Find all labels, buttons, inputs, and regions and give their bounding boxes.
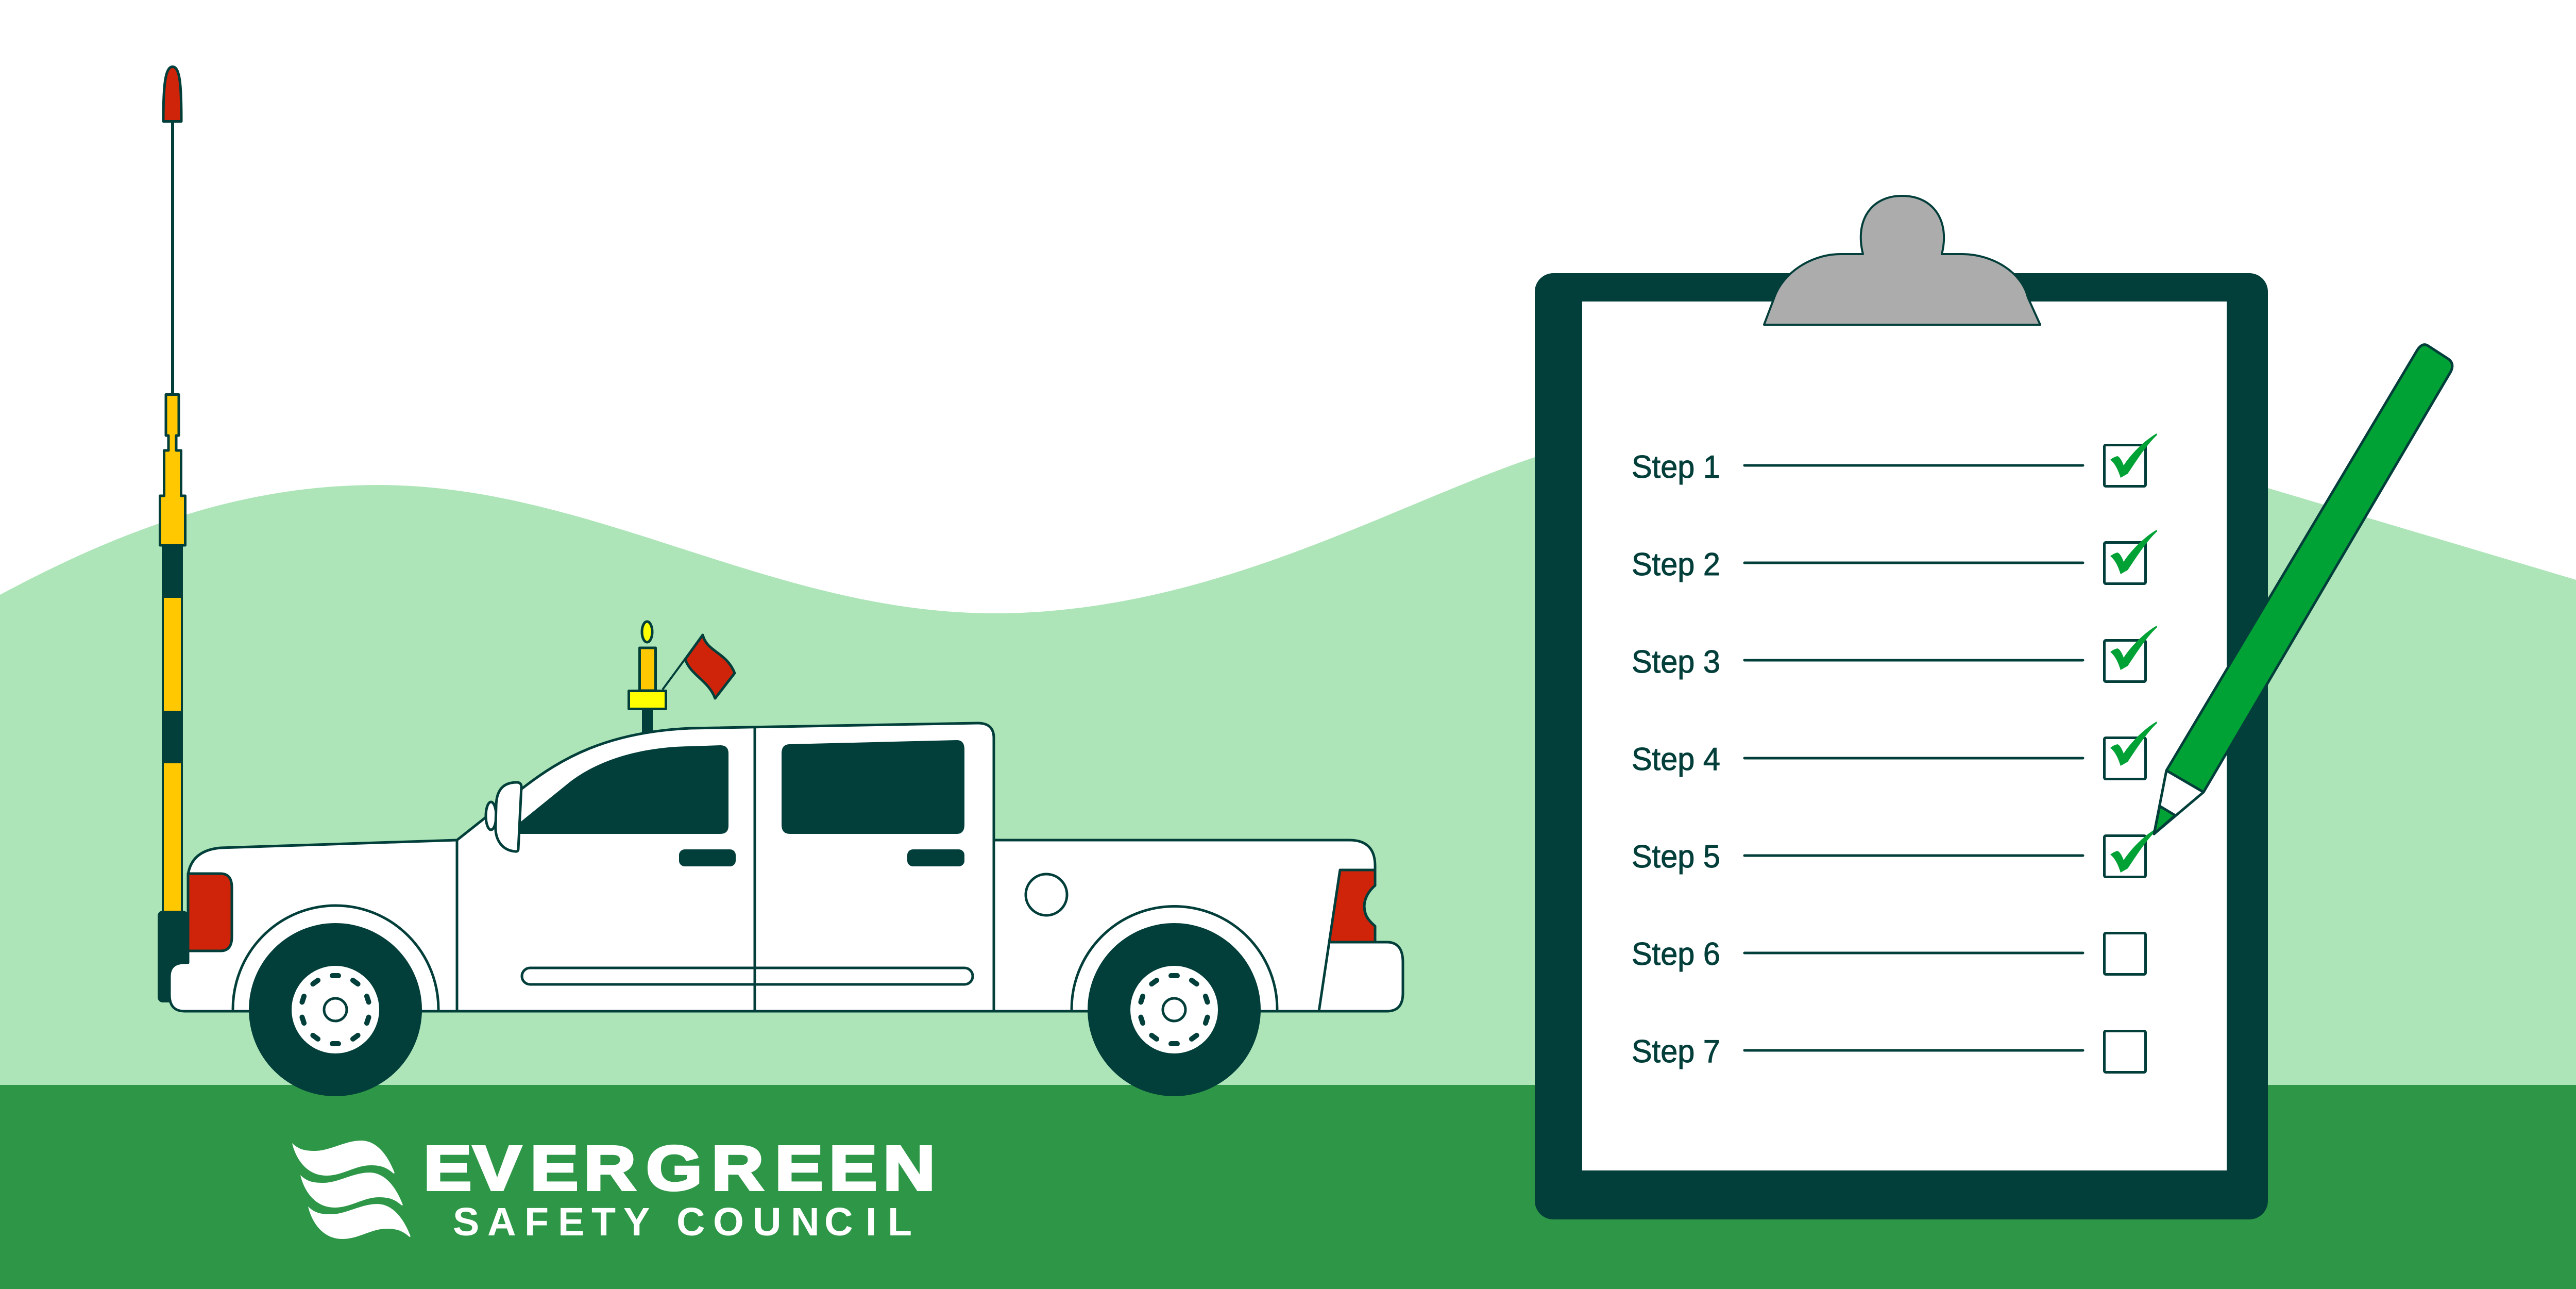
step 7 row: Step 7	[1632, 1034, 1720, 1069]
pole yellow stripe upper	[164, 598, 181, 711]
step 4 row: Step 4	[1632, 742, 1720, 777]
step 1 row	[1632, 433, 2157, 487]
beacon lamp	[642, 622, 652, 642]
front wheel arch	[233, 906, 438, 1009]
fuel door	[1026, 874, 1067, 915]
pickup truck	[170, 723, 1403, 1096]
logo: Evergreen Safety Council	[292, 1133, 935, 1244]
hub bolts	[302, 976, 369, 1044]
front wheel	[249, 923, 422, 1096]
logo icon: three waves	[292, 1141, 411, 1239]
clipboard	[1535, 196, 2268, 1219]
rear window	[782, 740, 964, 834]
front door handle	[679, 849, 736, 866]
side mirror	[496, 782, 521, 851]
step 5 row	[1632, 828, 2157, 877]
mirror lens	[486, 802, 496, 830]
rear door handle	[907, 849, 964, 866]
step 6 row: Step 6	[1632, 936, 1720, 972]
antenna red tip	[163, 67, 181, 122]
metal clip	[1764, 196, 2040, 325]
rear red tail light	[1329, 870, 1375, 942]
flag staff	[663, 635, 703, 690]
background: dark green ground	[0, 1085, 2576, 1289]
whip antenna pole	[158, 67, 188, 1002]
paper sheet	[1582, 302, 2227, 1170]
logo wordmark: EVERGREEN: EVERGREEN	[423, 1133, 935, 1203]
pole dark body	[162, 546, 183, 912]
roof beacon and flag	[629, 622, 735, 736]
beacon yellow base	[629, 691, 666, 709]
cab and door dividers	[457, 728, 994, 1011]
background: light green hills	[0, 423, 2576, 1085]
step 3 row: Step 3	[1632, 644, 1720, 680]
pole yellow stripe lower	[164, 763, 181, 913]
door divider over strip	[753, 968, 756, 984]
step 4 row	[1632, 722, 2157, 779]
pole base mount	[158, 911, 188, 1002]
clipboard board	[1535, 273, 2268, 1219]
pencil wood tip	[2154, 771, 2204, 834]
step 6 row	[1632, 933, 2145, 974]
beacon stalk	[642, 710, 653, 736]
pencil lead	[2154, 806, 2175, 834]
pencil	[2154, 345, 2452, 834]
front window	[517, 745, 728, 834]
logo wordmark: SAFETY COUNCIL: SAFETY COUNCIL	[453, 1200, 912, 1244]
step 2 row: Step 2	[1632, 547, 1720, 582]
front red light	[188, 874, 232, 951]
tire	[1088, 923, 1261, 1096]
tailgate and bumper lines	[1319, 942, 1387, 1011]
hub bolts	[1141, 976, 1208, 1044]
antenna wire	[171, 122, 174, 394]
rear wheel arch	[1072, 906, 1277, 1009]
hubcap	[1130, 966, 1218, 1053]
tire	[249, 923, 422, 1096]
step 3 row	[1632, 626, 2157, 681]
pencil body	[2166, 345, 2452, 792]
hub centre	[1163, 998, 1185, 1021]
hub centre	[324, 998, 347, 1021]
hubcap	[292, 966, 379, 1053]
antenna yellow connector	[160, 395, 185, 545]
step 1 row: Step 1	[1632, 449, 1720, 485]
red flag	[685, 635, 735, 698]
rear wheel	[1088, 923, 1261, 1096]
truck body outline	[170, 723, 1403, 1011]
step 2 row	[1632, 530, 2157, 583]
step 5 row: Step 5	[1632, 839, 1720, 875]
beacon amber body	[640, 648, 655, 691]
side trim strip	[522, 968, 973, 984]
step 7 row	[1632, 1031, 2145, 1072]
